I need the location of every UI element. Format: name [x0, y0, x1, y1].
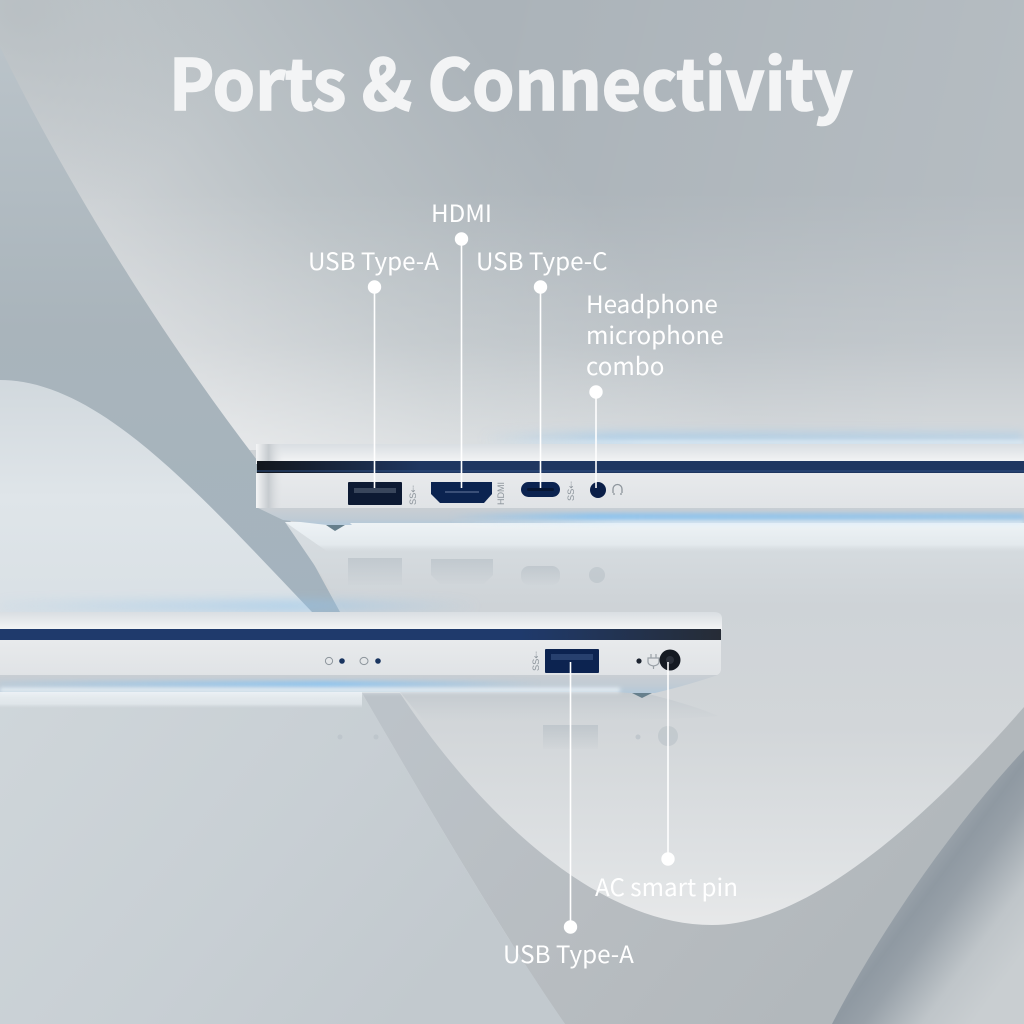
lower darker surface: [362, 693, 1024, 1024]
upper wall surface: [0, 0, 1024, 620]
left bump: [0, 380, 312, 612]
lower left surface: [0, 690, 565, 1024]
lower laptop side view: [0, 600, 722, 698]
hinge gap: [0, 629, 721, 640]
callout: HDMI: HDMI: [431, 194, 492, 229]
USB-C port: [521, 482, 560, 497]
laptop lid: [0, 612, 722, 630]
USB-C logo: SS⇠: [566, 481, 576, 501]
laptop base: [256, 473, 1024, 508]
USB-A port: [348, 482, 402, 505]
callout: headphone microphone combo: Headphone: [586, 285, 718, 320]
DC jack: [660, 650, 680, 670]
middle bell surface: [0, 522, 1024, 940]
rubber foot: [326, 525, 345, 531]
callout: headphone microphone combo: microphone: [586, 316, 724, 351]
reflection of upper laptop: [285, 522, 1024, 585]
headphone jack: [590, 482, 606, 498]
callout: USB Type-C: [476, 242, 608, 488]
icon: plug: [648, 654, 659, 669]
USB-A port: [545, 649, 599, 673]
callout: HDMI: [431, 194, 492, 488]
charge LED: [636, 658, 642, 664]
callout: USB Type-A bottom: [503, 662, 634, 970]
USB 3 logo: SS⇠: [408, 485, 418, 505]
callout: USB Type-A left: USB Type-A: [308, 242, 439, 277]
callout: headphone microphone combo: combo: [586, 347, 664, 382]
laptop lid: [256, 444, 1024, 463]
callout: USB Type-A left: [308, 242, 439, 488]
callout: AC smart pin: AC smart pin: [595, 868, 738, 903]
laptop base: [0, 640, 721, 676]
laptop underside: [0, 675, 718, 693]
left dark surface: [0, 47, 340, 612]
title: Ports & Connectivity: [169, 30, 853, 131]
HDMI logo: HDMI: [496, 482, 506, 505]
callout: AC smart pin: [595, 662, 738, 903]
reflection of lower laptop: [0, 692, 718, 749]
power indicator: [325, 657, 345, 665]
callout: USB Type-C: USB Type-C: [476, 242, 608, 277]
glow above upper laptop: [480, 432, 1024, 446]
right corner band: [832, 750, 1024, 1024]
USB 3 logo: SS⇠: [531, 651, 541, 671]
storage indicator: [360, 657, 381, 665]
laptop underside: [258, 508, 1024, 525]
hinge gap: [257, 461, 1024, 473]
icon: headset: [613, 484, 622, 494]
upper laptop side view: [256, 432, 1024, 531]
glow above lower laptop: [0, 600, 480, 612]
callout: headphone microphone combo: [586, 285, 724, 488]
rubber foot: [632, 693, 652, 698]
callout: USB Type-A bottom: USB Type-A: [503, 935, 634, 970]
HDMI port: [431, 482, 492, 503]
